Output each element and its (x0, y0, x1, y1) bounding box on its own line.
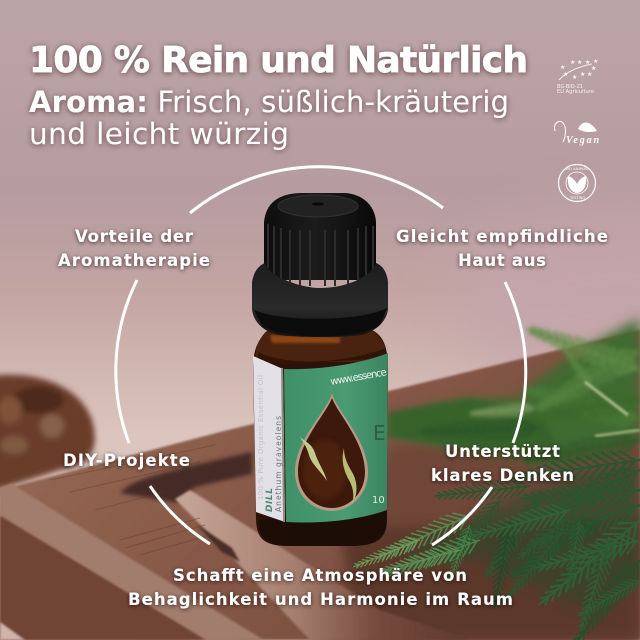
callout: Unterstützt klares Denken: Unterstützt (445, 442, 560, 461)
badge: no animal testing: TESTING (569, 196, 585, 200)
amber neck (255, 330, 388, 362)
drop: flame right (343, 448, 356, 504)
subtitle line 2: und leicht würzig (29, 117, 289, 151)
board groove (120, 452, 252, 503)
callout: Schafft eine Atmosphäre: Schafft eine Atmosphäre von (173, 566, 467, 585)
table shade right (320, 430, 640, 640)
badge stars: ★ (560, 64, 565, 71)
bottle (253, 330, 388, 546)
callout: DIY-Projekte: DIY-Projekte (63, 451, 190, 470)
callout: Gleicht empfindliche Haut aus: Gleicht empfindliche (396, 227, 608, 246)
badge stars: ★ (580, 71, 585, 78)
callout: Unterstützt klares Denken (431, 442, 574, 485)
badge stars: ★ (591, 65, 596, 72)
label: brand: E (373, 421, 386, 445)
badge: no animal testing: NO ANIMAL (566, 167, 588, 171)
badge stars (560, 58, 598, 81)
callout: Schafft eine Atmosphäre (128, 566, 513, 609)
label text: latin name: Anethum graveolens (274, 416, 283, 512)
label text: oil type: 100 % Pure Organic Essential Oil (257, 375, 265, 500)
callout: Unterstützt klares Denken: klares Denken (431, 466, 574, 485)
badge stars: ★ (570, 59, 575, 66)
cap: ribbed top (264, 193, 376, 286)
label text: website: www.essence (330, 367, 388, 388)
ring: left arc (116, 280, 137, 443)
callout: Vorteile der Aromatherapie: Aromatherapie (58, 251, 210, 270)
title: 100 % Rein und Natürlich (29, 40, 528, 81)
background: nut (0, 375, 95, 492)
badge: EU organic (557, 58, 598, 95)
label: volume: 10 (372, 495, 385, 506)
board inner rail (175, 490, 470, 640)
badge stars: ★ (585, 59, 590, 66)
badge stars: ★ (593, 58, 598, 65)
badge stars: ★ (577, 59, 582, 66)
drop: flame left (300, 437, 327, 481)
glass body (253, 330, 388, 546)
callout: Gleicht empfindliche Haut aus (396, 227, 608, 270)
badge: EU organic: BG-BIO-21 (557, 84, 583, 90)
ring: right arc (505, 282, 526, 443)
ring: top arc (190, 167, 443, 213)
badge stars: ★ (587, 71, 592, 78)
dill: sharp lower sprigs (351, 447, 640, 640)
dill: blurred upper sprigs (388, 318, 640, 473)
label: white strip (253, 356, 285, 522)
wood grain (50, 445, 215, 555)
cap: collar (252, 263, 388, 337)
callout: Gleicht empfindliche Haut aus: Haut aus (458, 251, 546, 270)
callout: Vorteile der Aromatherapie: Vorteile der (75, 227, 194, 246)
badge: EU organic: EU Agriculture (557, 89, 594, 95)
badge: vegan: Vegan (566, 135, 599, 146)
badge stars: ★ (563, 71, 568, 78)
board front side (0, 516, 205, 640)
callout: Schafft eine Atmosphäre: Behaglichkeit und Harmonie im Raum (128, 590, 513, 609)
bottle base (258, 510, 386, 546)
badge stars: ★ (572, 74, 577, 81)
subtitle line 1: aroma: Aroma: Frisch, süßlich-kräuterig (29, 85, 509, 119)
board rail speckle (196, 524, 240, 562)
ring: lower left arc (150, 486, 210, 544)
badge: vegan (555, 121, 599, 146)
callout: Vorteile der Aromatherapie (58, 227, 210, 270)
badge: no animal testing (558, 164, 596, 202)
ring: lower right arc (432, 487, 492, 545)
label: green panel (284, 353, 388, 522)
label text: DILL: DILL (265, 488, 275, 512)
board bevel (0, 484, 264, 640)
wooden board (0, 330, 640, 640)
label: amber drop window (295, 393, 368, 511)
